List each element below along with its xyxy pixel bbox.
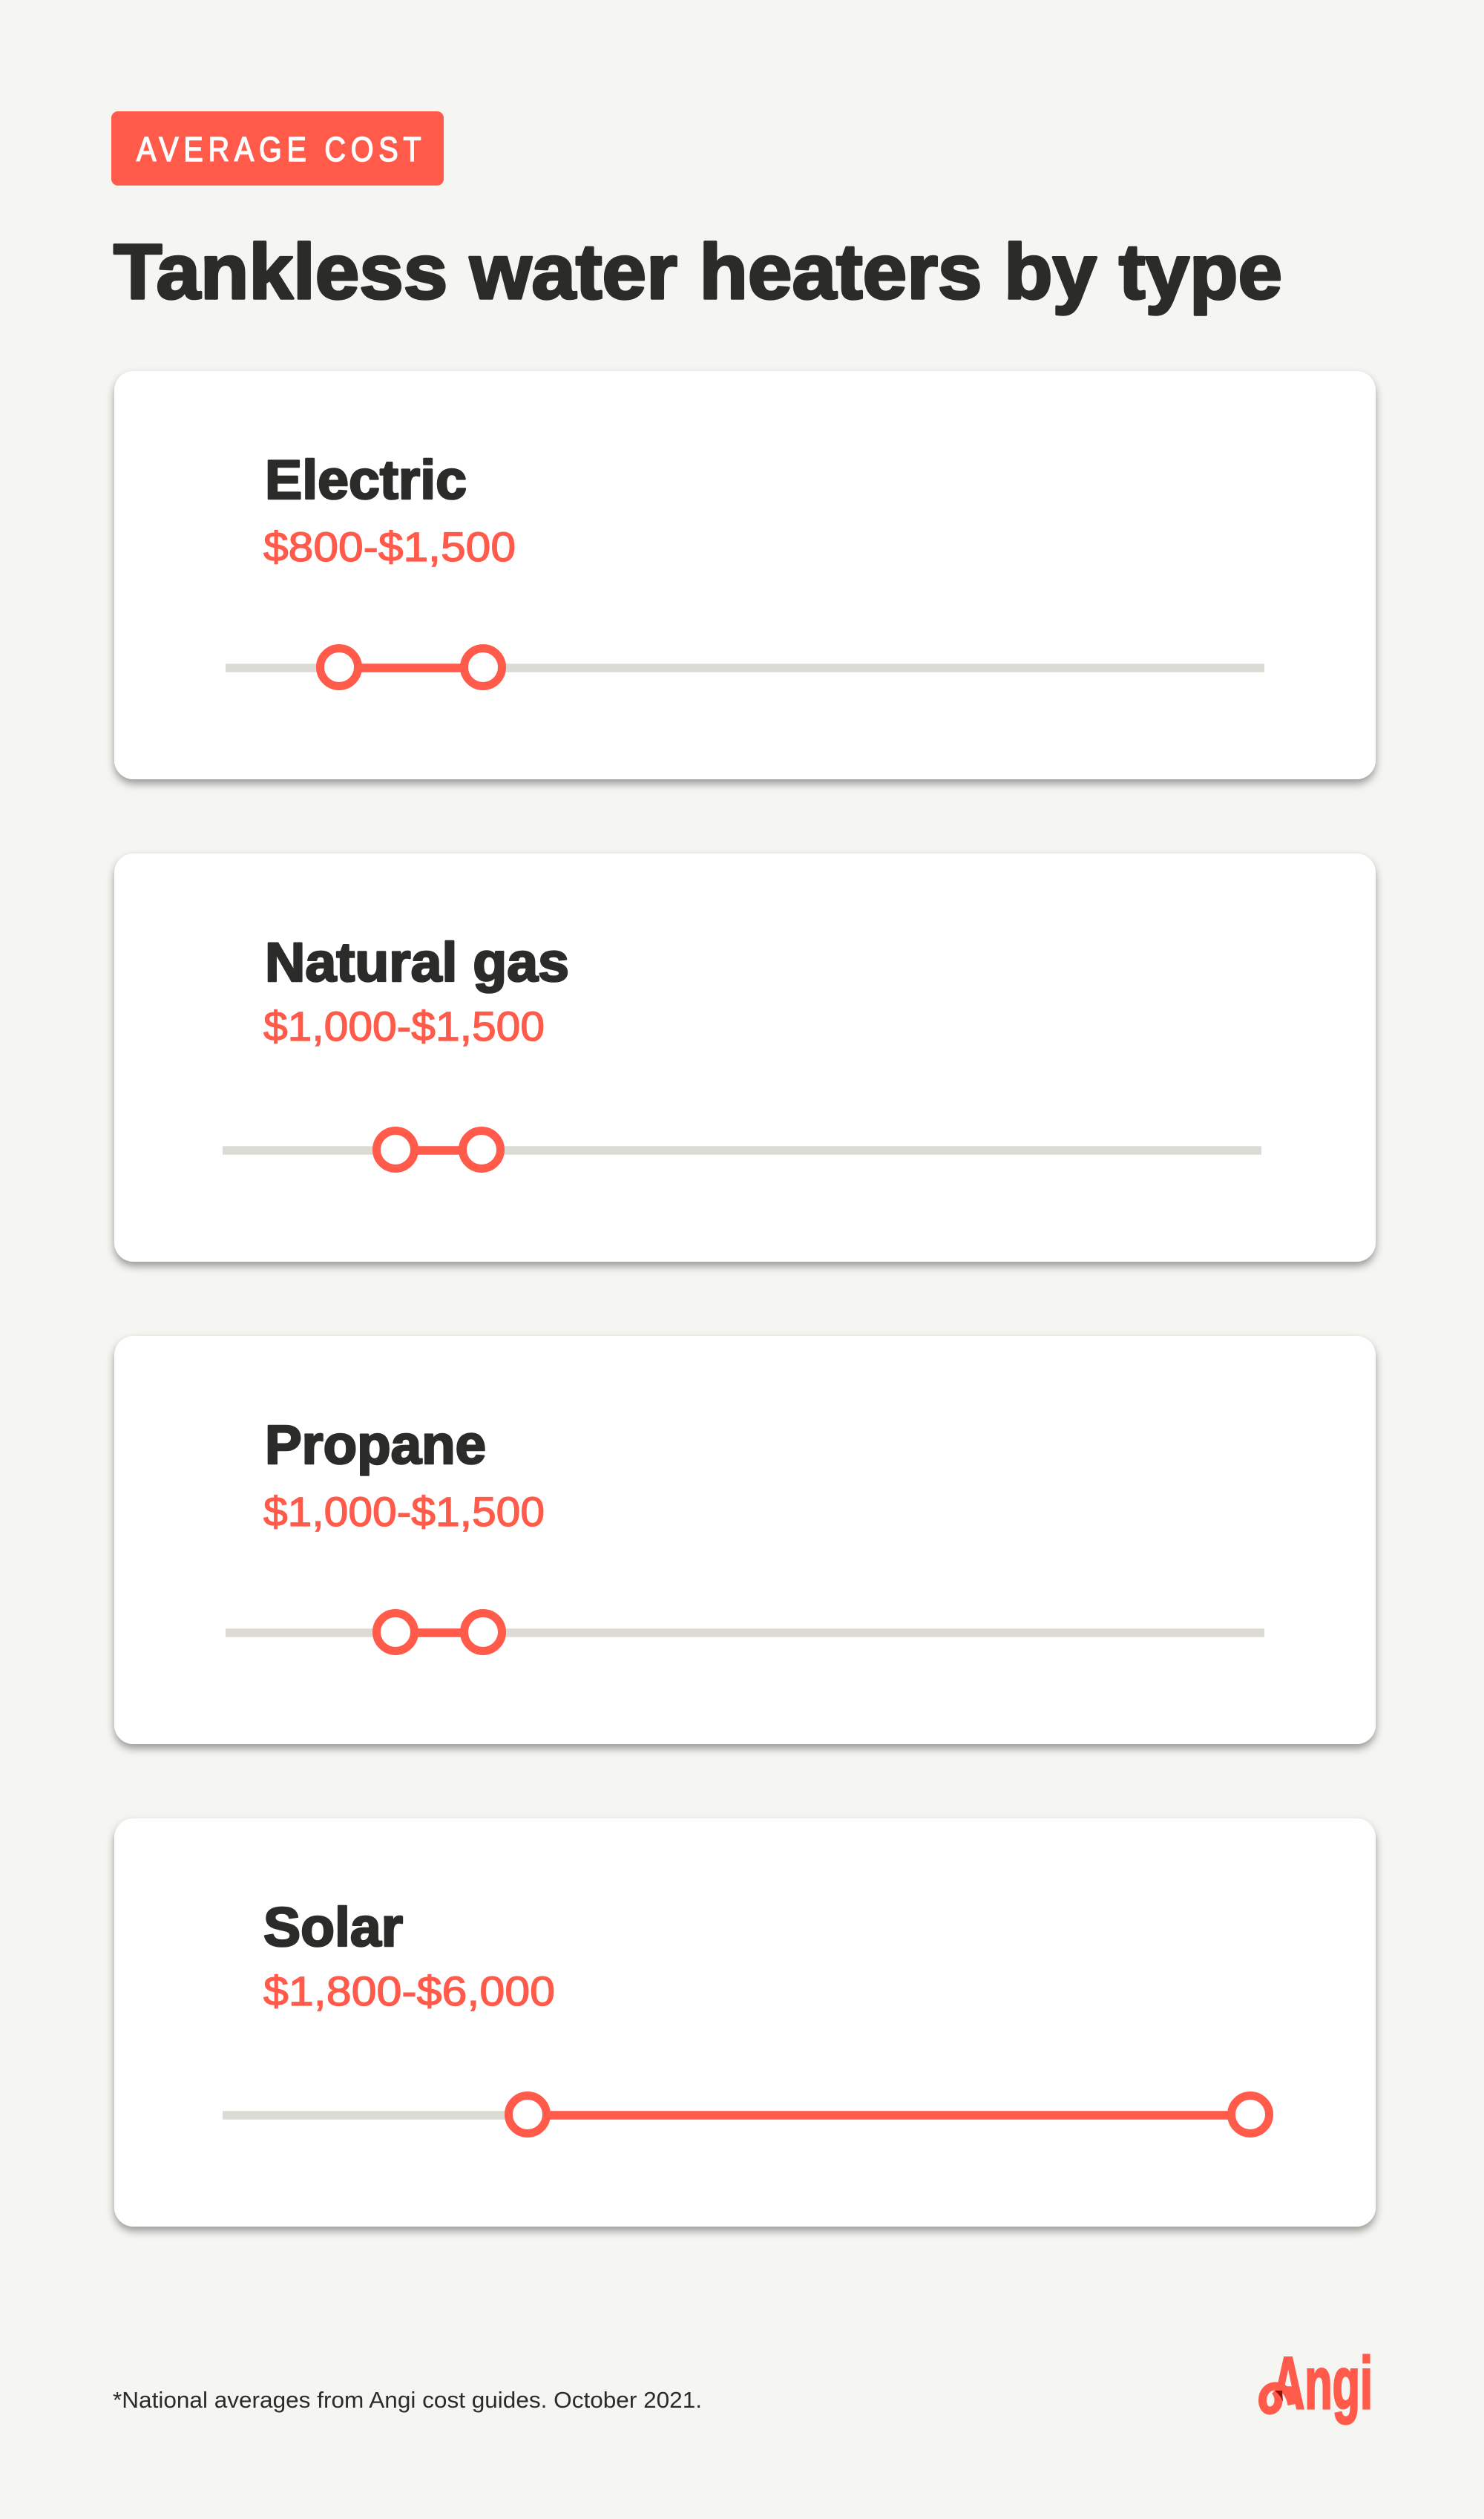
price: solar: $1,800-$6,000 bbox=[263, 1968, 555, 2014]
range chart: solar bbox=[223, 2096, 1269, 2133]
price: natural gas: $1,000-$1,500 bbox=[263, 1003, 545, 1049]
heading: propane: Propane bbox=[265, 1414, 486, 1475]
heading: solar: Solar bbox=[263, 1896, 403, 1958]
panel: propane bbox=[114, 1336, 1376, 1744]
panel: electric bbox=[114, 371, 1376, 779]
range chart: propane bbox=[226, 1614, 1264, 1651]
range chart: natural gas bbox=[223, 1131, 1261, 1168]
badge: average cost: AVERAGE COST bbox=[137, 131, 421, 169]
badge: average cost bbox=[111, 111, 444, 186]
range chart: electric bbox=[226, 649, 1264, 686]
logo: Angi: Angi bbox=[1272, 2342, 1373, 2424]
logo: Angi bbox=[1263, 2342, 1373, 2424]
heading: natural gas: Natural gas bbox=[265, 931, 569, 993]
heading: electric: Electric bbox=[265, 449, 467, 511]
panel: natural gas bbox=[114, 854, 1376, 1262]
price: electric: $800-$1,500 bbox=[263, 523, 516, 570]
panel: solar bbox=[114, 1818, 1376, 2227]
footnote: *National averages from Angi cost guides. October 2021. bbox=[113, 2387, 702, 2413]
price: propane: $1,000-$1,500 bbox=[263, 1488, 545, 1535]
title: Tankless water heaters by type bbox=[114, 229, 1282, 315]
